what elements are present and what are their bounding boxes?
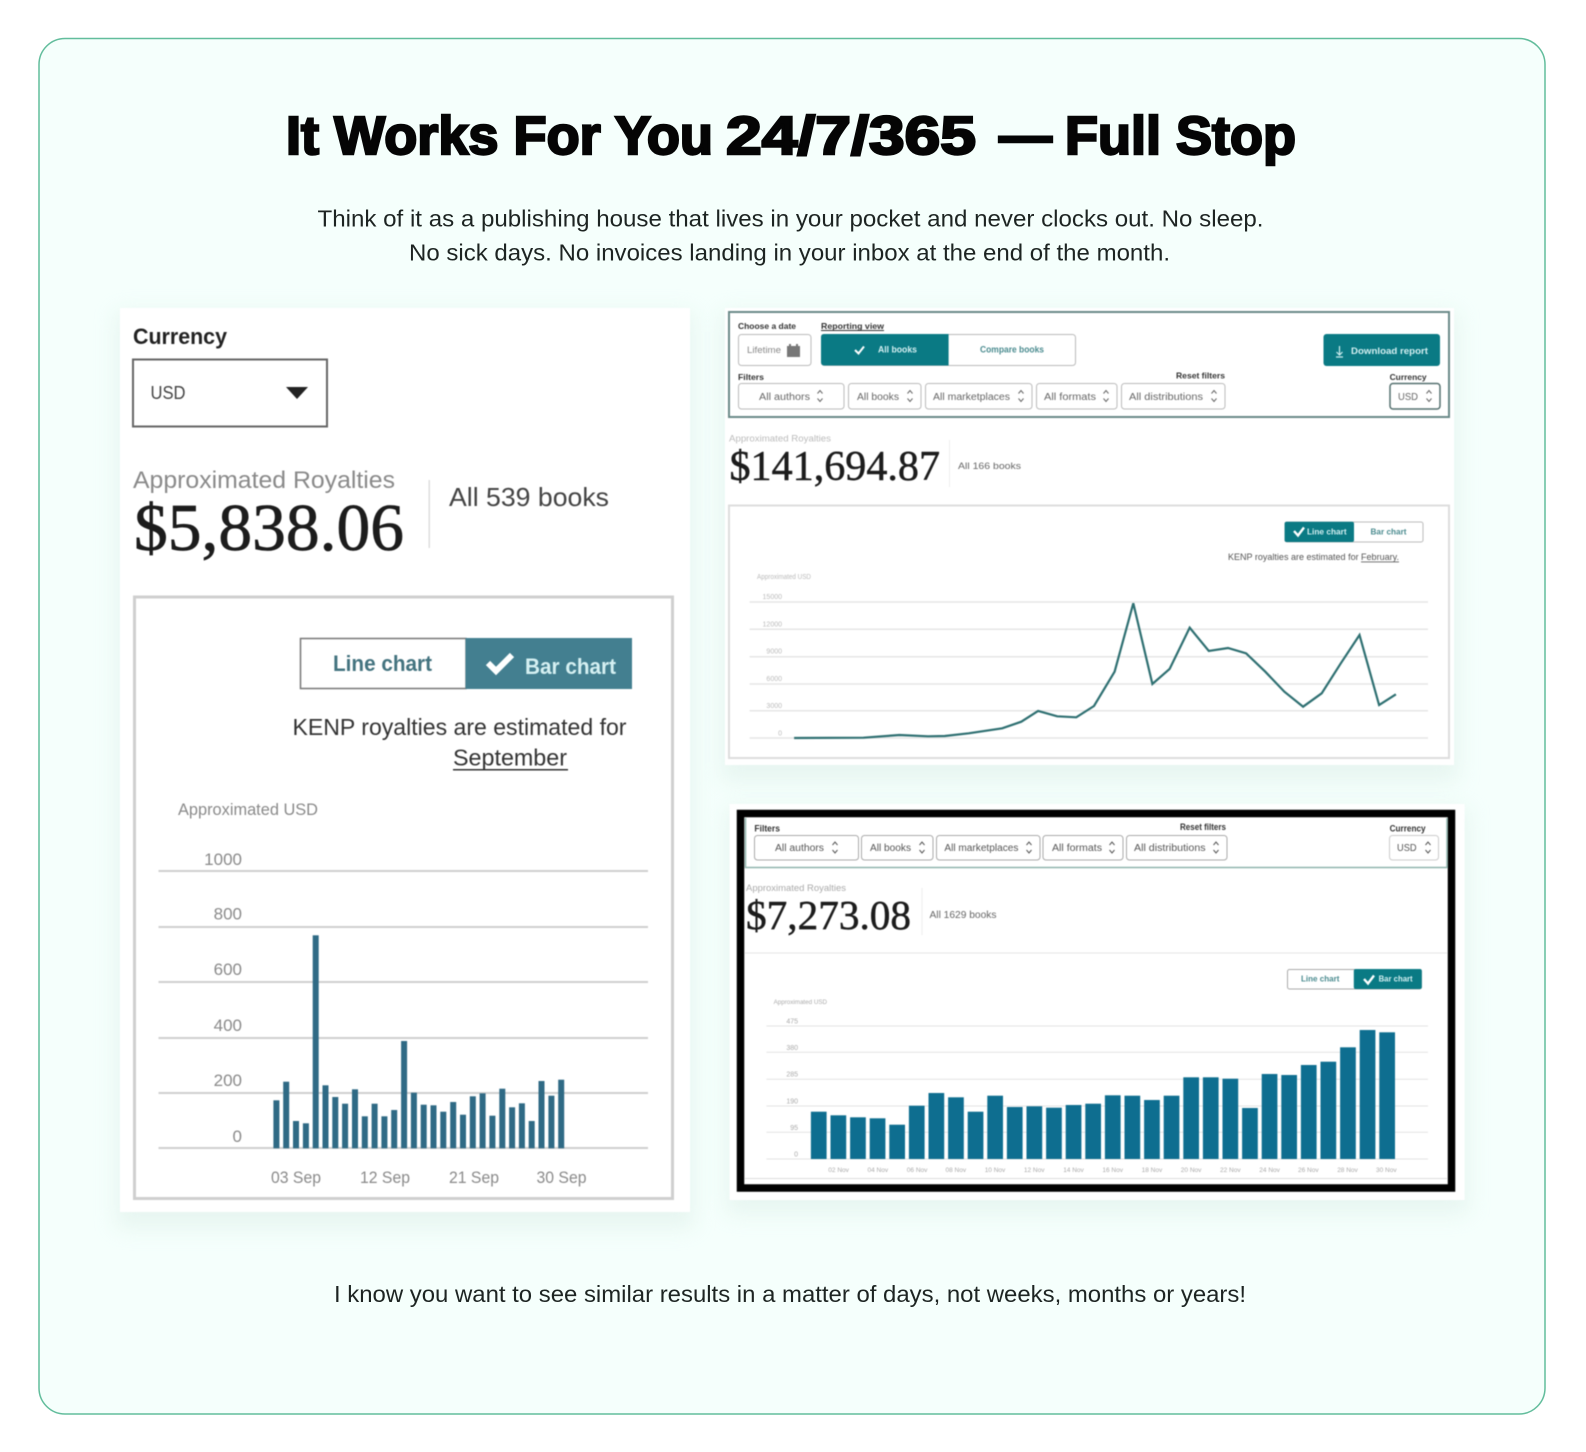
line chart: lifetime royalties: Approximated USD: [757, 574, 811, 581]
filter bar: Filters: [738, 372, 764, 382]
filter dropdowns: All distributions: [1134, 843, 1206, 854]
royalties summary: $7,273.08: [746, 892, 911, 938]
download report button: [1324, 334, 1440, 366]
filter bar: Currency: [1390, 824, 1426, 834]
royalties summary: All 539 books: [449, 482, 609, 512]
filter dropdowns: All books: [857, 392, 899, 403]
chart type toggle: [1288, 969, 1422, 989]
bar chart: daily royalties: 1000: [204, 850, 242, 869]
royalties summary: Approximated Royalties: [729, 434, 832, 444]
chart frame: [134, 597, 672, 1198]
filter dropdowns: All books: [870, 843, 911, 854]
filter dropdowns: All distributions: [1129, 392, 1203, 403]
royalties summary: [133, 467, 609, 565]
royalties summary: Approximated Royalties: [133, 467, 395, 494]
bar chart: November royalties: [745, 999, 1447, 1179]
filter bar: Currency: [1390, 372, 1427, 382]
chart type toggle: Bar chart: [525, 654, 617, 679]
bar chart: November royalties: 06 Nov: [907, 1167, 928, 1174]
bar chart: November royalties: 04 Nov: [867, 1167, 889, 1174]
line chart: lifetime royalties: 9000: [766, 649, 782, 656]
bar chart: daily royalties: Approximated USD: [178, 800, 318, 819]
bar chart: November royalties: 380: [786, 1045, 798, 1052]
bar chart: November royalties: 22 Nov: [1220, 1167, 1241, 1174]
line chart: lifetime royalties: [750, 574, 1428, 738]
bar chart: November royalties: 95: [790, 1125, 798, 1132]
currency dropdown: USD: [150, 383, 186, 403]
filter dropdowns: All formats: [1052, 843, 1102, 854]
bar chart: November royalties: 16 Nov: [1102, 1167, 1124, 1174]
bar chart: November royalties: 02 Nov: [828, 1167, 850, 1174]
panel: currency and daily bar chart, September: [116, 308, 694, 1228]
filter dropdowns: All authors: [759, 392, 810, 403]
filter dropdowns: All formats: [1044, 392, 1096, 403]
KENP note: September: [453, 744, 567, 770]
bar chart: daily royalties: 600: [214, 960, 242, 979]
chart frame: [729, 506, 1449, 758]
royalties summary: $141,694.87: [730, 444, 940, 490]
title: [286, 106, 1296, 166]
chart type toggle: Bar chart: [1370, 527, 1407, 537]
bar chart: November royalties: 08 Nov: [945, 1167, 967, 1174]
bar chart: November royalties: 26 Nov: [1298, 1167, 1319, 1174]
royalties summary: All 166 books: [958, 461, 1021, 472]
currency dropdown: [133, 360, 327, 426]
filter bar: [746, 818, 1447, 868]
download report button: Download report: [1351, 346, 1429, 357]
royalties summary: $5,838.06: [134, 491, 404, 565]
chart type toggle: Line chart: [1301, 974, 1340, 984]
filter dropdowns: All authors: [775, 843, 824, 854]
filter dropdowns: USD: [1397, 843, 1417, 854]
bar chart: November royalties: 18 Nov: [1142, 1167, 1163, 1174]
royalties summary: Approximated Royalties: [746, 883, 847, 893]
line chart: lifetime royalties: 0: [778, 731, 782, 738]
bar chart: daily royalties: 21 Sep: [449, 1168, 499, 1187]
chart type toggle: [1285, 522, 1423, 542]
bar chart: November royalties: Approximated USD: [774, 999, 827, 1006]
bar chart: daily royalties: 200: [214, 1071, 242, 1090]
bar chart: daily royalties: [158, 800, 648, 1187]
title: It Works For You: [286, 106, 713, 166]
currency label: Currency: [133, 324, 228, 349]
royalties summary: All 1629 books: [930, 910, 996, 921]
title: —: [999, 106, 1052, 166]
chart type toggle: Line chart: [1307, 527, 1347, 537]
bar chart: November royalties: 285: [786, 1072, 798, 1079]
KENP note: [292, 714, 627, 770]
bar chart: November royalties: 0: [794, 1152, 798, 1159]
bar chart: November royalties: 190: [786, 1098, 798, 1105]
bar chart: November royalties: 28 Nov: [1337, 1167, 1359, 1174]
filter dropdowns: USD: [1398, 392, 1418, 403]
chart type toggle: Bar chart: [1379, 974, 1413, 984]
black frame: [740, 814, 1452, 1188]
filter dropdowns: All marketplaces: [933, 392, 1010, 403]
bar chart: daily royalties: 400: [214, 1016, 242, 1035]
KENP note: February.: [1361, 552, 1399, 562]
filter bar: Reporting view: [821, 321, 884, 331]
filter dropdowns: All marketplaces: [944, 843, 1018, 854]
chart type toggle: [300, 638, 632, 689]
line chart: lifetime royalties: 15000: [763, 594, 782, 601]
bar chart: daily royalties: 800: [214, 904, 242, 924]
bar chart: November royalties: 24 Nov: [1259, 1167, 1281, 1174]
title: Full Stop: [1065, 106, 1296, 166]
bar chart: November royalties: 30 Nov: [1376, 1167, 1397, 1174]
bar chart: daily royalties: 30 Sep: [536, 1168, 586, 1187]
bar chart: daily royalties: 03 Sep: [271, 1168, 321, 1187]
bar chart: daily royalties: 0: [233, 1127, 242, 1146]
filter dropdowns: [754, 836, 1438, 860]
panel: November bar chart report: [726, 804, 1468, 1214]
bar chart: November royalties: 20 Nov: [1181, 1167, 1202, 1174]
filter bar: Reset filters: [1180, 822, 1226, 832]
line chart: lifetime royalties: 3000: [766, 703, 782, 710]
panel: lifetime line chart report: [721, 308, 1458, 782]
line chart: lifetime royalties: 12000: [763, 622, 782, 629]
subtitle: Think of it as a publishing house that lives in your pocket and never clocks out. No sleep.: [318, 206, 1264, 232]
chart type toggle: Line chart: [333, 651, 433, 676]
KENP note: KENP royalties are estimated for: [292, 714, 627, 740]
bar chart: November royalties: 10 Nov: [985, 1167, 1006, 1174]
title: 24/7/365: [726, 106, 976, 166]
KENP note: KENP royalties are estimated for: [1228, 552, 1359, 562]
bar chart: daily royalties: 12 Sep: [360, 1168, 410, 1187]
reporting view toggle: All books: [878, 345, 917, 355]
icon: calendar: [787, 344, 800, 357]
line chart: lifetime royalties: 6000: [766, 676, 782, 683]
filter dropdowns: [738, 384, 1440, 409]
royalties summary: [729, 434, 1021, 490]
filter bar: Filters: [754, 824, 780, 834]
subtitle: No sick days. No invoices landing in your inbox at the end of the month.: [409, 240, 1170, 266]
closing line: I know you want to see similar results in a matter of days, not weeks, months or years!: [334, 1281, 1246, 1307]
filter bar: Choose a date: [738, 321, 796, 331]
filter bar: Lifetime: [747, 345, 781, 355]
reporting view toggle: Compare books: [980, 345, 1044, 355]
reporting view toggle: [821, 334, 1076, 366]
bar chart: November royalties: 475: [786, 1018, 798, 1025]
filter bar: [729, 312, 1449, 417]
royalties summary: [746, 883, 996, 938]
bar chart: November royalties: 12 Nov: [1024, 1167, 1045, 1174]
filter bar: Reset filters: [1176, 371, 1225, 381]
subtitle: [318, 206, 1264, 266]
bar chart: November royalties: 14 Nov: [1063, 1167, 1085, 1174]
